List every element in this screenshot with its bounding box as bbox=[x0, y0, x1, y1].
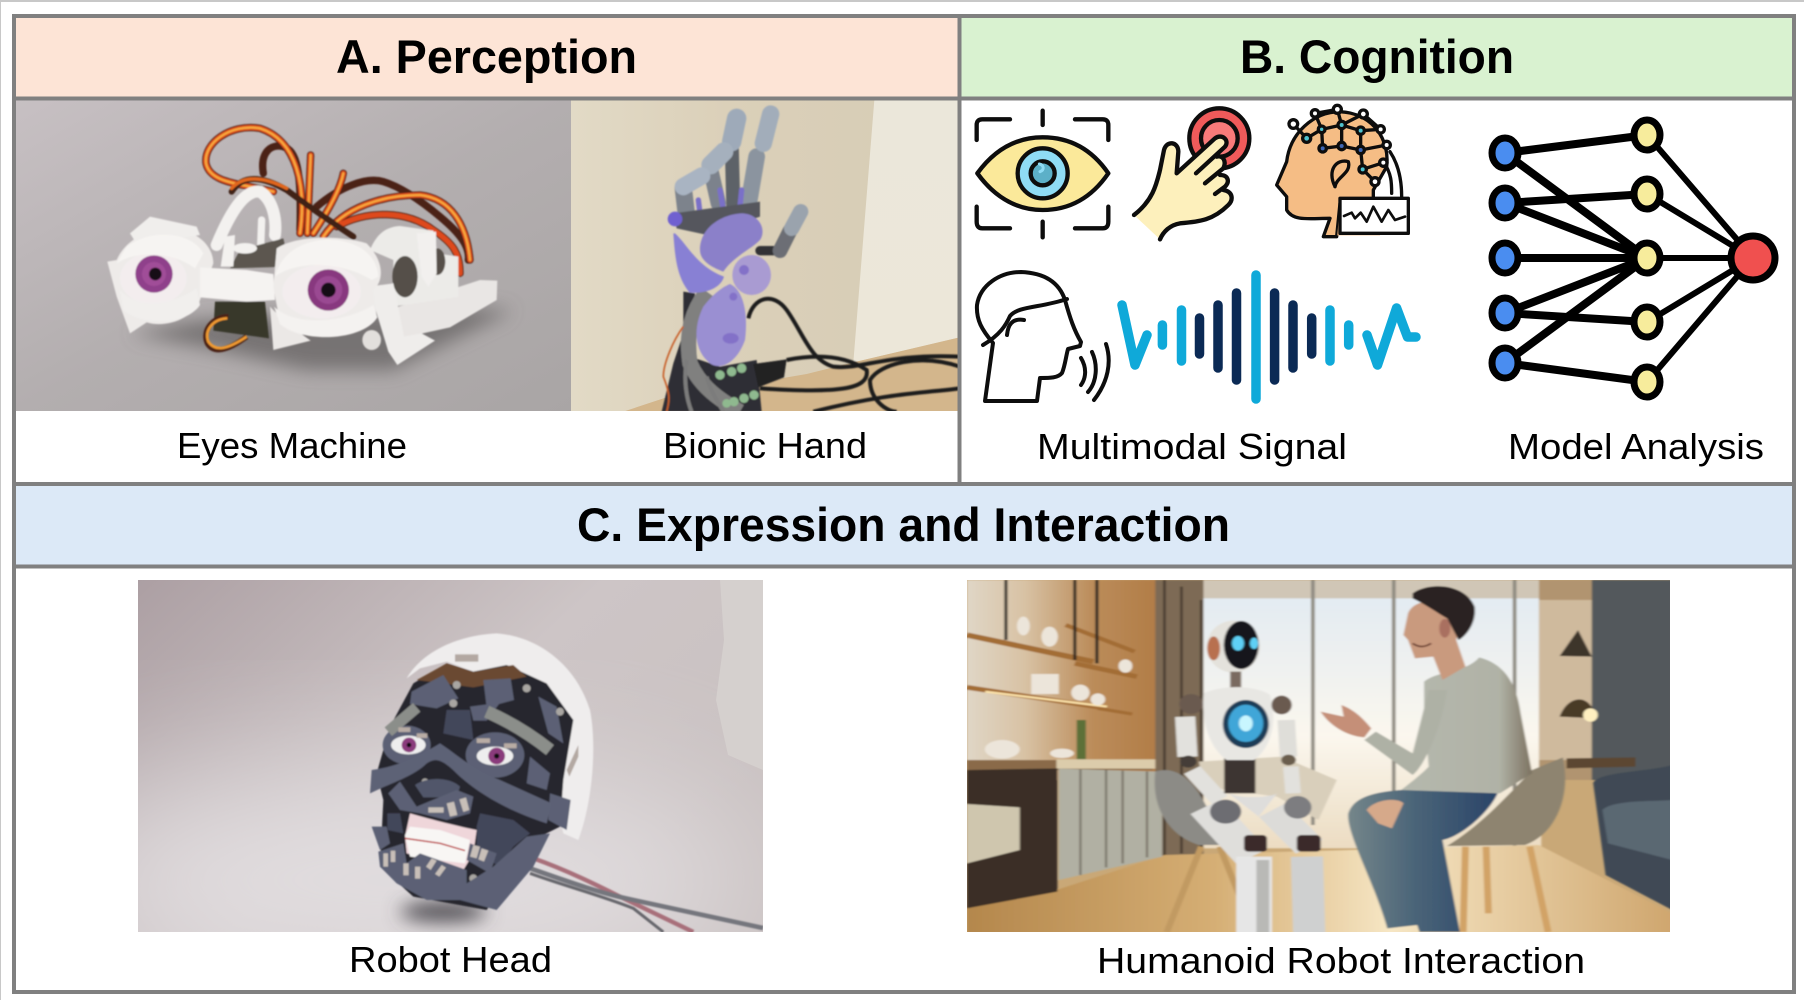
photo: bionic hand bbox=[570, 100, 960, 413]
icon: EEG head bbox=[1277, 105, 1408, 237]
icon: audio waveform bbox=[1122, 275, 1416, 399]
icon: speaking head bbox=[977, 272, 1109, 401]
thumb bbox=[760, 212, 801, 251]
servo wires bbox=[206, 128, 470, 273]
interior bbox=[377, 663, 573, 910]
right sofa and lamps bbox=[1567, 757, 1635, 768]
input nodes bbox=[1492, 138, 1518, 378]
hidden nodes bbox=[1634, 120, 1660, 397]
photo: humanoid robot interaction bbox=[967, 580, 1672, 933]
photo: robot head bbox=[138, 580, 763, 932]
left eye bbox=[107, 229, 213, 333]
heading band: B. Cognition: B. Cognition bbox=[1240, 30, 1514, 83]
network edges bbox=[1505, 135, 1647, 382]
shelves bbox=[967, 625, 1137, 714]
heading band: C. Expression and Interaction bbox=[14, 484, 1794, 566]
teeth bbox=[405, 813, 477, 870]
robot eyes bbox=[391, 736, 426, 754]
person bbox=[1321, 586, 1532, 932]
photo: eyes machine bbox=[15, 100, 571, 411]
caption: Bionic Hand: Bionic Hand bbox=[663, 425, 867, 466]
panel: C. Expression and Interaction bbox=[14, 484, 1794, 990]
output node bbox=[1731, 236, 1775, 280]
caption: Model Analysis: Model Analysis bbox=[1508, 426, 1764, 467]
caption: Humanoid Robot Interaction: Humanoid Robot Interaction bbox=[1097, 940, 1585, 981]
panel: A. Perception bbox=[14, 16, 960, 466]
caption: Robot Head: Robot Head bbox=[349, 939, 552, 980]
right eye bbox=[270, 307, 311, 350]
upper lip and jaw bbox=[372, 782, 550, 910]
chair behind bbox=[1199, 757, 1337, 820]
arch bbox=[217, 192, 275, 263]
grey plates bbox=[383, 675, 571, 830]
panel: B. Cognition bbox=[961, 16, 1794, 467]
robot bbox=[1179, 621, 1321, 933]
helmet bbox=[407, 633, 593, 840]
heading band: A. Perception bbox=[14, 16, 959, 98]
mask band bbox=[370, 743, 552, 823]
servo block bbox=[213, 302, 269, 338]
cables bbox=[530, 858, 763, 932]
diagram: neural network model bbox=[1492, 120, 1775, 397]
icon: eye tracking bbox=[977, 111, 1108, 237]
fingers bbox=[683, 114, 771, 217]
hand base and wiring bbox=[662, 292, 762, 412]
back tray bbox=[393, 280, 497, 338]
caption: Multimodal Signal: Multimodal Signal bbox=[1037, 426, 1347, 467]
heading band: A. Perception: A. Perception bbox=[336, 30, 637, 83]
left chair bbox=[1164, 846, 1236, 932]
heading band: B. Cognition bbox=[961, 16, 1794, 98]
caption: Eyes Machine: Eyes Machine bbox=[177, 425, 407, 466]
soft palm pads bbox=[673, 233, 724, 293]
icons row: eye, touch, EEG bbox=[977, 105, 1408, 239]
brows bbox=[388, 707, 550, 750]
cabinet bbox=[967, 760, 1153, 770]
icon: touch bbox=[1134, 108, 1249, 239]
floor bbox=[967, 845, 1672, 933]
right chair bbox=[1463, 847, 1548, 932]
heading band: C. Expression and Interaction: C. Expression and Interaction bbox=[577, 498, 1230, 551]
